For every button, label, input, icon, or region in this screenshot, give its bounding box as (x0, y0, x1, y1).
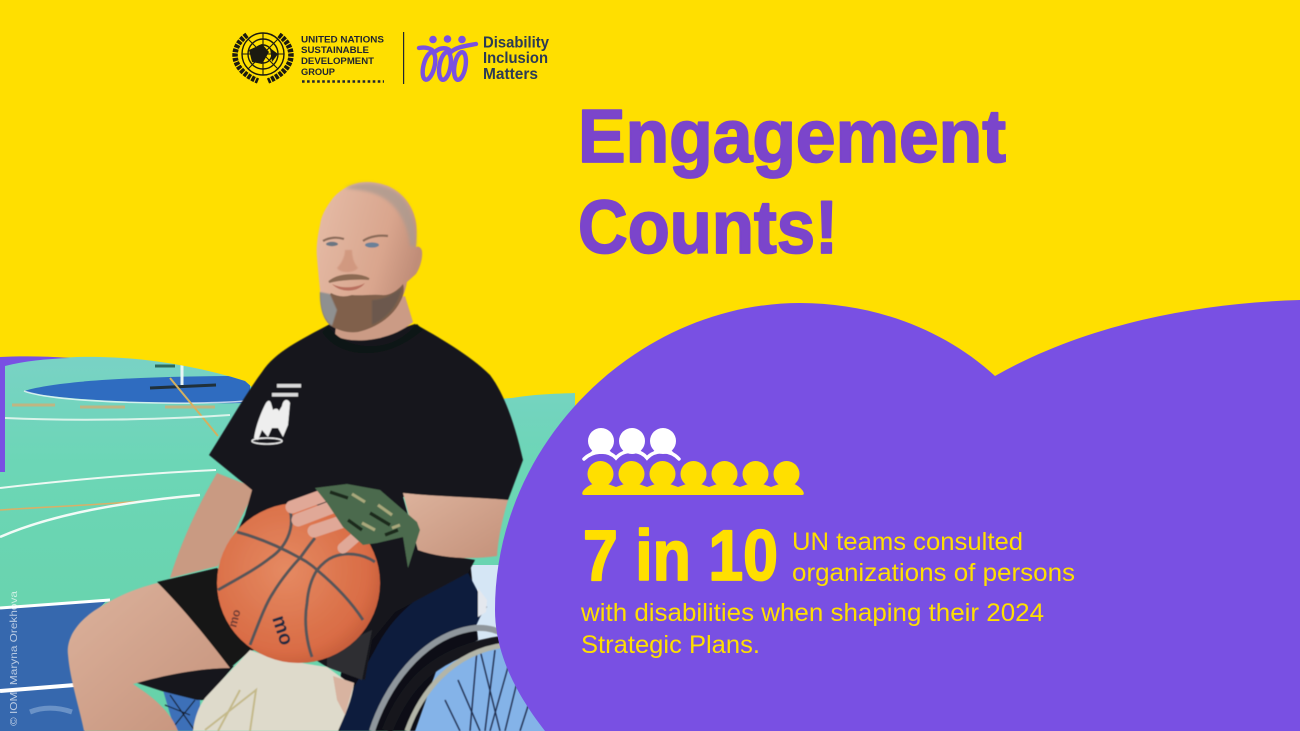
glove (315, 484, 420, 568)
statistic description: with disabilities when shaping their 2024 (580, 599, 1044, 627)
title: Engagement (578, 94, 1006, 178)
statistic description: Strategic Plans. (581, 631, 760, 659)
logo text: DEVELOPMENT (301, 55, 374, 66)
photo: man in wheelchair holding a basketball (68, 182, 530, 731)
basketball: mo (267, 613, 297, 648)
black shorts (157, 568, 300, 668)
left arm (170, 473, 253, 578)
statistic: 7 in 10: 7 in 10 (583, 517, 778, 596)
nose (337, 250, 358, 272)
t-shirt (209, 324, 523, 680)
logo text: Inclusion (483, 50, 548, 67)
purple blob panel (495, 300, 1300, 731)
shirt emblem (252, 384, 301, 444)
right forearm (403, 493, 508, 558)
statistic description (580, 528, 1075, 659)
logo text: Disability (483, 34, 549, 52)
moustache and mouth (329, 275, 369, 282)
photo credit: © IOM/ Maryna Orekhova (8, 591, 20, 726)
purple strip at left edge (0, 356, 70, 472)
logo text: GROUP (301, 66, 335, 77)
head (317, 182, 422, 332)
stump skin (333, 676, 354, 715)
title: Counts! (578, 185, 838, 269)
statistic description: organizations of persons (792, 559, 1075, 587)
scalp stubble (345, 183, 416, 247)
logo text: Matters (483, 66, 538, 83)
white people row (584, 428, 679, 459)
hand and fingers (292, 495, 358, 548)
yellow people row (582, 461, 804, 495)
basketball: mo (225, 608, 244, 629)
icon: people, 7 of 10 highlighted (582, 428, 804, 495)
right leg and thigh (68, 583, 240, 731)
photo background: basketball court (0, 350, 580, 731)
statistic description: UN teams consulted (792, 528, 1023, 556)
shirt collar (322, 324, 423, 353)
logo text: UNITED NATIONS (301, 34, 384, 44)
glove camouflage (352, 494, 400, 530)
icon: three figures (419, 35, 476, 81)
logo text (483, 34, 549, 83)
neck (335, 296, 413, 340)
prosthesis (193, 650, 354, 731)
basketball (217, 503, 380, 663)
logo text: SUSTAINABLE (301, 44, 369, 55)
shirt hem (327, 630, 372, 680)
title (578, 94, 1006, 269)
logo: Disability Inclusion Matters (419, 34, 549, 83)
logo: UN Sustainable Development Group (235, 33, 384, 82)
beard (320, 284, 404, 332)
wheelchair (163, 560, 530, 731)
logo divider (403, 32, 404, 84)
eyes and brows (323, 236, 388, 241)
dark under thigh (128, 666, 234, 700)
logo text (301, 34, 384, 77)
icon: UN emblem (235, 33, 291, 81)
